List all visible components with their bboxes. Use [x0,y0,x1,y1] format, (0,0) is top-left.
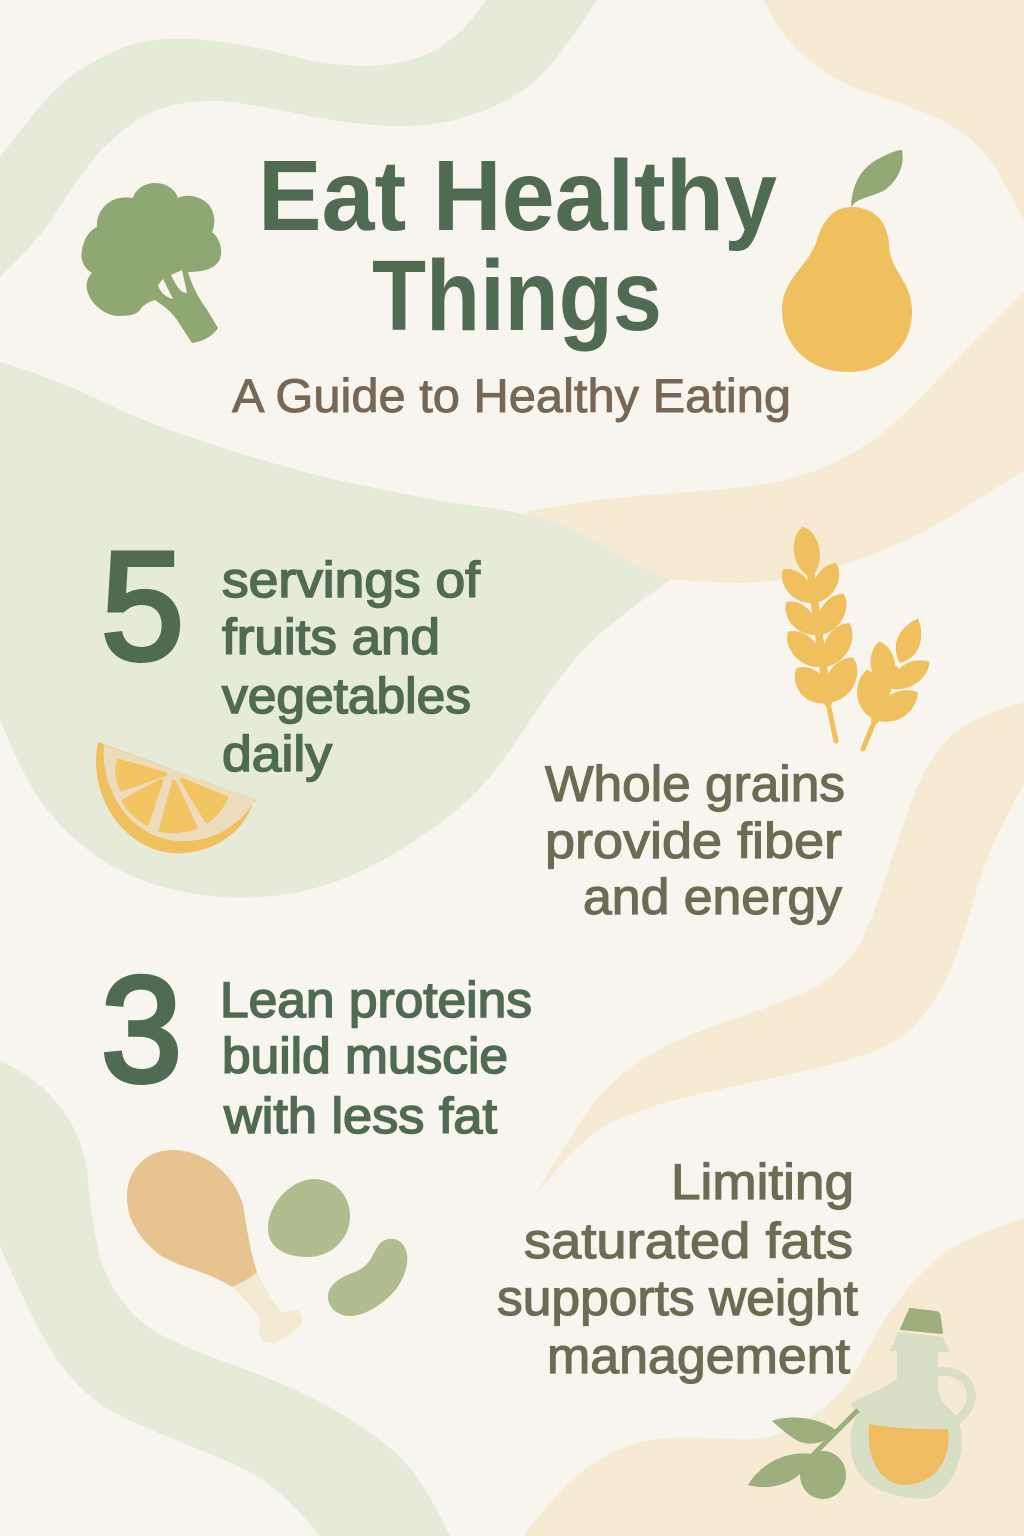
text block: servings of fruits and vegetables [222,552,480,782]
text block: limiting saturated fats: saturated fats [524,1213,853,1269]
text block: servings of fruits and vegetables: daily [222,726,332,782]
stat number: 3: 3 [101,945,182,1113]
stat number: 5: 5 [101,520,184,692]
background: large green blob [0,362,670,898]
background: top-left green ribbon [0,0,597,277]
text block: whole grains: provide fiber [545,813,842,869]
icon: orange slice [96,742,257,853]
subtitle: A Guide to Healthy Eating [232,369,791,422]
text block: servings of fruits and vegetables: fruits and [222,609,440,665]
icon: wheat stalks [775,525,935,749]
text block: limiting saturated fats: supports weight [497,1270,858,1326]
text block: whole grains [545,756,845,925]
icon: olive branch [748,1410,858,1499]
background: top-right peach blob [763,0,1024,221]
text block: servings of fruits and vegetables: vegetables [222,668,471,724]
background: middle peach band [523,292,1024,590]
title [258,140,777,352]
title: Things [372,240,662,352]
text block: limiting saturated fats: management [547,1328,850,1384]
background: bottom-left green ribbon [0,1060,450,1536]
background: right peach ribbon [535,702,1024,1196]
text block: lean proteins: Lean proteins [220,972,532,1028]
icon: bean [328,1239,407,1316]
text block: limiting saturated fats: Limiting [671,1154,854,1210]
text block: whole grains: and energy [583,869,842,925]
text block: servings of fruits and vegetables: servings of [222,552,480,608]
icon: broccoli [81,183,221,343]
icon: chicken drumstick [127,1150,302,1343]
icon: olive oil bottle [850,1309,971,1499]
icon: green egg shape [268,1179,350,1257]
title: Eat Healthy [258,140,777,252]
text block: lean proteins [220,972,532,1144]
background: bottom-right peach blob [523,1218,1024,1536]
icon: pear [782,150,912,372]
text block: lean proteins: build muscie [222,1028,508,1084]
text block: lean proteins: with less fat [223,1088,497,1144]
text block: whole grains: Whole grains [545,756,845,812]
text block: limiting saturated fats [497,1154,858,1384]
